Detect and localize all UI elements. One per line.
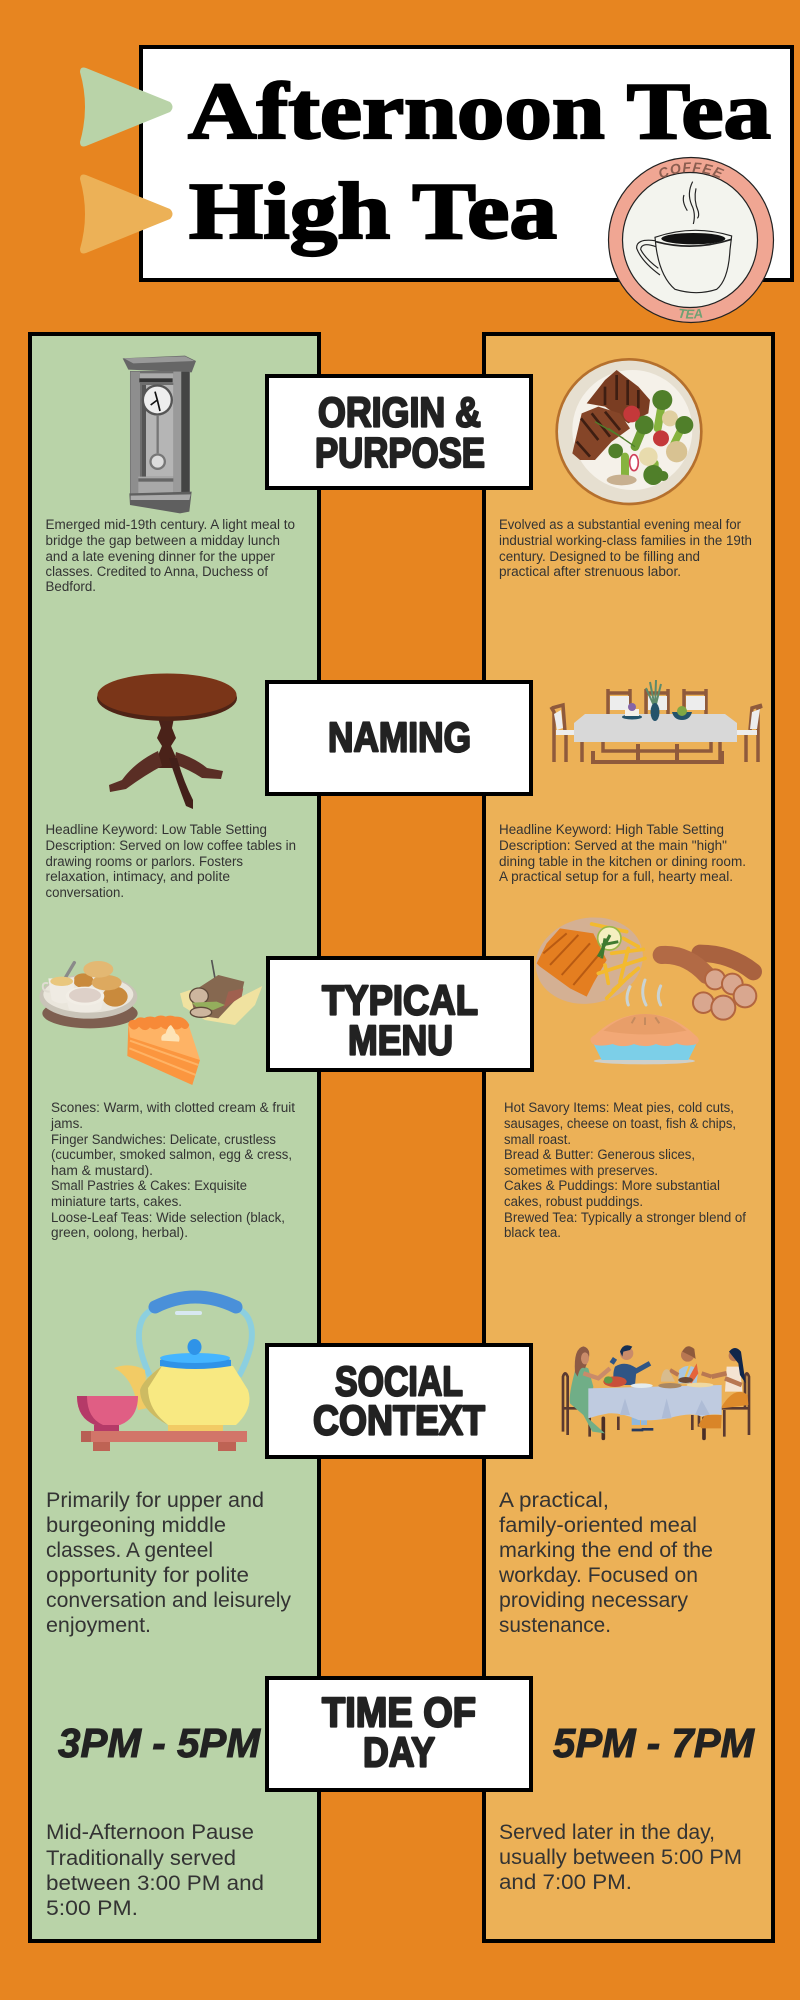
text: afternoon tea social context: burgeoning middle [46, 1514, 226, 1537]
heading: naming: NAMING [328, 714, 471, 760]
text: high tea origin: century. Designed to be filling and [499, 549, 700, 564]
text: high tea menu: Hot Savory Items: Meat pies, cold cuts, [504, 1100, 734, 1115]
text: afternoon tea menu: ham & mustard). [51, 1163, 153, 1178]
icon: fish and chips plate [528, 908, 651, 1014]
icon: steaming pie [590, 980, 699, 1064]
text: high tea menu: Bread & Butter: Generous slices, [504, 1147, 695, 1162]
text: afternoon tea social context: conversation and leisurely [46, 1589, 291, 1612]
text: high tea naming [499, 822, 746, 884]
text: afternoon tea menu: Finger Sandwiches: Delicate, crustless [51, 1132, 276, 1147]
text: afternoon tea time of day: 5:00 PM. [46, 1897, 138, 1920]
heading: origin and purpose: ORIGIN & [318, 388, 481, 436]
icon: finger sandwich [180, 960, 262, 1025]
text: afternoon tea menu: (cucumber, smoked salmon, egg & cress, [51, 1147, 292, 1162]
text: high tea social context: workday. Focused on [498, 1564, 698, 1587]
text: high tea origin: practical after strenuous labor. [499, 564, 681, 579]
heading: typical menu [268, 958, 532, 1070]
text: high tea menu: cakes, robust puddings. [504, 1194, 643, 1209]
badge label: coffee: COFFEE [659, 162, 724, 178]
heading: origin and purpose [267, 376, 531, 488]
text: high tea time of day [499, 1821, 742, 1894]
text: high tea social context: sustenance. [499, 1614, 611, 1637]
text: afternoon tea menu: Loose-Leaf Teas: Wide selection (black, [51, 1210, 285, 1225]
text: afternoon tea time of day: Traditionally served [46, 1847, 236, 1870]
text: high tea naming: Description: Served at the main "high" [499, 838, 727, 853]
time label: 5PM to 7PM: 5PM - 7PM [553, 1720, 755, 1766]
heading: social context [267, 1345, 531, 1457]
heading: typical menu: MENU [348, 1016, 453, 1064]
text: afternoon tea social context: enjoyment. [46, 1614, 151, 1637]
text: afternoon tea naming [46, 822, 296, 900]
text: afternoon tea origin: Bedford. [46, 579, 96, 594]
cup drawing [637, 182, 732, 293]
text: high tea menu: sausages, cheese on toast, fish & chips, [504, 1116, 736, 1131]
text: high tea origin [499, 517, 752, 579]
text: afternoon tea origin: and a late evening dinner for the upper [46, 549, 275, 564]
title: High Tea: High Tea [189, 168, 557, 256]
icon: grandfather clock [123, 356, 196, 513]
heading: time of day: DAY [363, 1728, 435, 1776]
text: high tea social context: marking the end of the [499, 1539, 713, 1562]
text: afternoon tea menu [50, 1100, 295, 1240]
text: afternoon tea naming: Headline Keyword: Low Table Setting [46, 822, 267, 837]
icon: coffee badge [608, 156, 774, 324]
badge label: tea: TEA [680, 308, 702, 319]
title box [141, 47, 792, 280]
text: afternoon tea social context: opportunity for polite [46, 1564, 249, 1587]
heading: origin and purpose: PURPOSE [315, 429, 485, 476]
text: afternoon tea naming: Description: Served on low coffee tables in [46, 838, 296, 853]
text: afternoon tea origin: bridge the gap between a midday lunch [46, 533, 280, 548]
icon: pie slice [127, 1015, 200, 1085]
text: afternoon tea time of day [46, 1821, 264, 1920]
heading: time of day: TIME OF [322, 1688, 476, 1736]
text: high tea menu [504, 1100, 746, 1240]
text: afternoon tea origin [46, 517, 295, 594]
icon: green arrow [80, 68, 172, 146]
text: afternoon tea naming: drawing rooms or parlors. Fosters [46, 854, 243, 869]
text: afternoon tea naming: conversation. [46, 885, 124, 900]
icon: orange arrow [80, 174, 172, 254]
text: afternoon tea social context: Primarily for upper and [46, 1489, 264, 1512]
text: afternoon tea time of day: Mid-Afternoon Pause [46, 1821, 254, 1844]
text: afternoon tea social context: classes. A genteel [46, 1539, 213, 1562]
icon: steak plate [555, 358, 703, 505]
text: high tea naming: A practical setup for a full, hearty meal. [499, 869, 733, 884]
text: afternoon tea social context [46, 1489, 291, 1637]
icon: dining table with chairs [551, 680, 762, 762]
text: high tea social context: family-oriented meal [499, 1514, 697, 1537]
text: afternoon tea menu: Scones: Warm, with clotted cream & fruit [51, 1100, 295, 1115]
text: afternoon tea origin: classes. Credited to Anna, Duchess of [46, 564, 268, 579]
text: high tea menu: small roast. [504, 1132, 571, 1147]
icon: family at dining table [563, 1345, 749, 1438]
text: high tea naming: Headline Keyword: High Table Setting [499, 822, 724, 837]
heading: naming [267, 682, 531, 794]
text: high tea menu: black tea. [504, 1225, 561, 1240]
text: afternoon tea menu: Small Pastries & Cakes: Exquisite [51, 1178, 247, 1193]
icon: scones plate [39, 961, 138, 1028]
panel: high tea column [484, 334, 773, 1941]
text: afternoon tea menu: jams. [50, 1116, 83, 1131]
text: high tea social context: providing necessary [499, 1589, 689, 1612]
text: high tea menu: sometimes with preserves. [504, 1163, 658, 1178]
time label: 3PM to 5PM: 3PM - 5PM [58, 1720, 261, 1766]
text: high tea menu: Cakes & Puddings: More substantial [504, 1178, 720, 1193]
panel: afternoon tea column [30, 334, 319, 1941]
text: high tea naming: dining table in the kitchen or dining room. [499, 854, 746, 869]
heading: time of day [267, 1678, 531, 1790]
text: high tea social context: A practical, [499, 1489, 609, 1512]
text: high tea origin: Evolved as a substantial evening meal for [499, 517, 741, 532]
text: afternoon tea menu: green, oolong, herbal). [51, 1225, 188, 1240]
heading: social context: CONTEXT [313, 1396, 485, 1444]
icon: teapot and cup [77, 1297, 252, 1451]
text: high tea social context [498, 1489, 713, 1637]
heading: typical menu: TYPICAL [322, 976, 478, 1024]
text: afternoon tea origin: Emerged mid-19th century. A light meal to [46, 517, 295, 532]
text: afternoon tea time of day: between 3:00 PM and [46, 1872, 264, 1895]
text: afternoon tea menu: miniature tarts, cakes. [51, 1194, 182, 1209]
text: high tea time of day: and 7:00 PM. [499, 1871, 632, 1894]
text: high tea origin: industrial working-class families in the 19th [499, 533, 752, 548]
heading: social context: SOCIAL [335, 1358, 463, 1404]
text: afternoon tea naming: relaxation, intimacy, and polite [46, 869, 230, 884]
title: Afternoon Tea: Afternoon Tea [188, 68, 771, 156]
text: high tea time of day: Served later in the day, [499, 1821, 715, 1844]
icon: low round table [97, 674, 237, 809]
text: high tea time of day: usually between 5:00 PM [499, 1846, 742, 1869]
icon: sausages [662, 953, 756, 1020]
text: high tea menu: Brewed Tea: Typically a stronger blend of [504, 1210, 746, 1225]
